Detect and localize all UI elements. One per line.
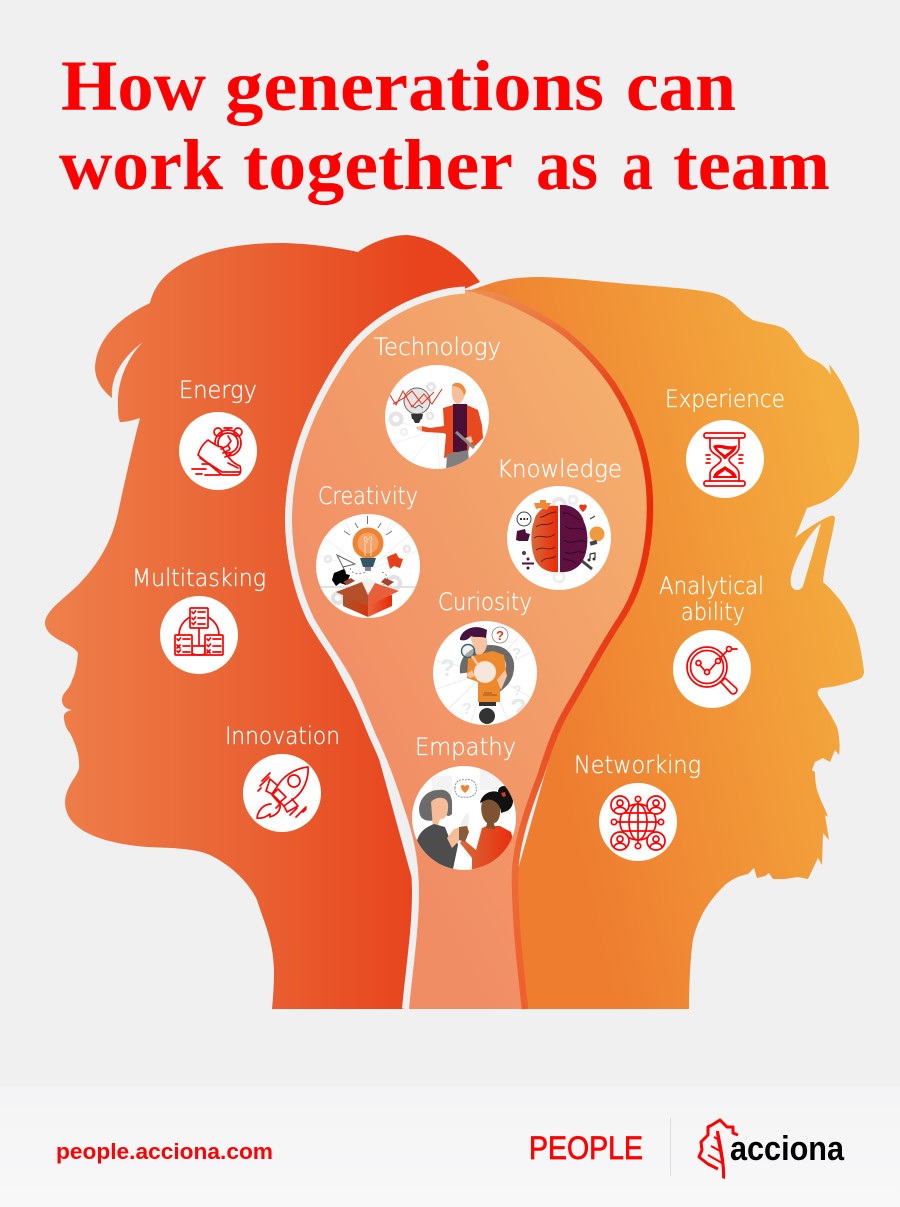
title: can xyxy=(626,46,736,126)
illustration: curiosity person and question mark: ? xyxy=(440,655,455,682)
illustration: creativity box and bulb xyxy=(316,514,420,618)
icon: hourglass xyxy=(686,420,764,498)
label: Technology: Technology xyxy=(374,333,501,361)
icon: globe network xyxy=(599,783,677,861)
label: Analytical ability: ability xyxy=(681,598,745,626)
illustration: curiosity person and question mark: ? xyxy=(512,645,521,662)
illustration: empathy two people xyxy=(412,766,516,872)
title: work xyxy=(59,125,223,205)
label: Energy: Energy xyxy=(179,376,257,404)
light bulb shape xyxy=(288,290,650,1009)
logo: acciona: acciona xyxy=(730,1130,845,1168)
title: a xyxy=(622,125,653,205)
left head silhouette xyxy=(45,235,480,1009)
icon: rocket xyxy=(243,754,321,832)
icon: magnifier with chart xyxy=(673,630,751,708)
label: Experience: Experience xyxy=(665,385,785,413)
label: Creativity: Creativity xyxy=(318,482,418,510)
title: together xyxy=(243,125,513,205)
right head silhouette xyxy=(468,277,864,1009)
footer band xyxy=(0,1087,900,1207)
title xyxy=(59,46,830,205)
title: How xyxy=(61,46,206,126)
label: Empathy: Empathy xyxy=(415,733,516,761)
icon: connected checklists xyxy=(160,596,238,674)
illustration: curiosity person and question mark: ? xyxy=(462,701,472,718)
footer divider xyxy=(670,1118,671,1176)
illustration: knowledge brain xyxy=(507,486,611,590)
footer label: PEOPLE: PEOPLE xyxy=(529,1130,643,1166)
icon: running shoe and stopwatch xyxy=(179,412,257,490)
label: Curiosity: Curiosity xyxy=(438,588,532,616)
label: Analytical ability xyxy=(659,572,764,626)
title: team xyxy=(673,125,830,205)
title: generations xyxy=(225,46,604,126)
label: Networking: Networking xyxy=(574,751,701,779)
label: Knowledge: Knowledge xyxy=(497,455,622,483)
title: as xyxy=(536,125,598,205)
label: Innovation: Innovation xyxy=(225,722,340,750)
illustration: curiosity person and question mark: ? xyxy=(510,693,527,724)
label: Analytical ability: Analytical xyxy=(659,572,764,600)
illustration: curiosity person and question mark xyxy=(433,621,537,725)
illustration: curiosity person and question mark: ? xyxy=(513,682,522,698)
illustration: technology presenter xyxy=(385,365,490,470)
illustration: curiosity person and question mark: ? xyxy=(496,628,504,643)
label: Multitasking: Multitasking xyxy=(132,564,266,592)
footer url: people.acciona.com xyxy=(56,1139,273,1164)
logo: acciona xyxy=(699,1120,845,1179)
